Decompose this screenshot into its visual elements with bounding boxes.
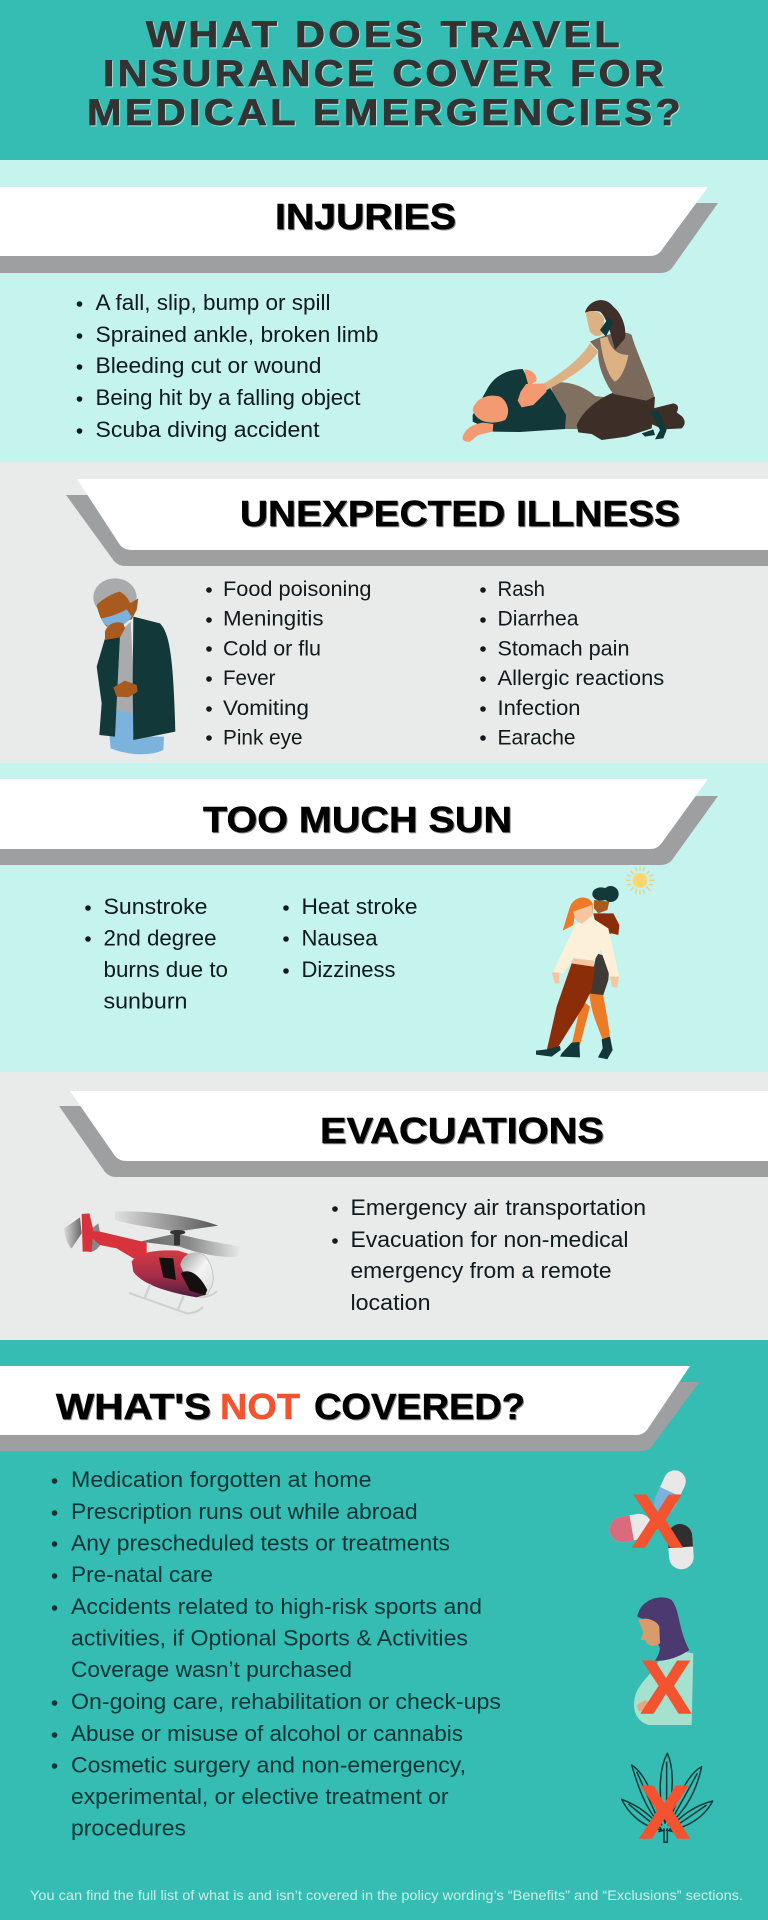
- list: sun column 2: Heat stroke: [302, 894, 418, 919]
- list: sun column 1: 2nd degree: [104, 926, 216, 950]
- list: sun column 2: Dizziness: [302, 957, 396, 982]
- list: illnesses column 2: Diarrhea: [498, 608, 579, 631]
- list: exclusions: Prescription runs out while abroad: [71, 1499, 418, 1524]
- icon: pregnant woman crossed out: [634, 1597, 693, 1729]
- list: sun column 1: [85, 894, 228, 1014]
- list: illnesses column 2: [480, 578, 664, 750]
- list: illnesses column 2: Infection: [498, 697, 580, 720]
- list: injuries: A fall, slip, bump or spill: [96, 290, 330, 315]
- icon: capsules crossed out: X: [632, 1479, 683, 1563]
- ribbon: unexpected illness: [66, 479, 768, 566]
- title: WHAT DOES TRAVEL: [146, 14, 623, 55]
- list: exclusions: Accidents related to high-risk sports and: [71, 1594, 482, 1619]
- list: sun column 1: Sunstroke: [104, 894, 208, 919]
- heading: too much sun: TOO MUCH SUN: [203, 799, 512, 840]
- list: illnesses column 1: Fever: [223, 667, 276, 690]
- list: evacuations: [332, 1195, 646, 1315]
- list: illnesses column 1: Meningitis: [223, 608, 324, 631]
- heading: evacuations: EVACUATIONS: [320, 1110, 604, 1151]
- ribbon: evacuations: [59, 1091, 768, 1177]
- header panel: [0, 0, 768, 160]
- list: injuries: Sprained ankle, broken limb: [96, 322, 378, 347]
- list: illnesses column 2: Allergic reactions: [498, 667, 664, 690]
- list: injuries: [77, 290, 378, 442]
- list: sun column 2: [283, 894, 418, 982]
- list: sun column 1: burns due to: [104, 957, 228, 982]
- illustration: woman calling for help beside injured man: [462, 300, 685, 442]
- illustration: red helicopter: [64, 1211, 240, 1313]
- list: sun column 2: Nausea: [302, 926, 378, 950]
- icon: pregnant woman crossed out: X: [641, 1645, 691, 1729]
- list: exclusions: procedures: [71, 1816, 186, 1840]
- icon: cannabis leaf crossed out: X: [639, 1770, 690, 1854]
- heading: injuries: INJURIES: [275, 196, 456, 237]
- icon: capsules crossed out: [608, 1467, 695, 1570]
- list: exclusions: Pre-natal care: [71, 1562, 213, 1587]
- list: illnesses column 1: Vomiting: [223, 697, 309, 720]
- list: injuries: Bleeding cut or wound: [96, 353, 322, 378]
- list: illnesses column 2: Stomach pain: [498, 637, 630, 660]
- list: illnesses column 2: Earache: [498, 726, 576, 750]
- heading: unexpected illness: UNEXPECTED ILLNESS: [240, 493, 680, 534]
- list: evacuations: Emergency air transportation: [350, 1195, 646, 1220]
- list: exclusions: [52, 1467, 501, 1840]
- title: MEDICAL EMERGENCIES?: [87, 92, 684, 133]
- icon: cannabis leaf crossed out: [622, 1753, 713, 1854]
- heading: what's not covered: NOT: [220, 1386, 300, 1427]
- heading: what's not covered: WHAT'S: [56, 1386, 211, 1427]
- heading: what's not covered: COVERED?: [314, 1386, 525, 1427]
- list: exclusions: Abuse or misuse of alcohol or cannabis: [71, 1721, 463, 1746]
- list: exclusions: experimental, or elective treatment or: [71, 1784, 449, 1809]
- list: evacuations: emergency from a remote: [350, 1258, 612, 1283]
- list: illnesses column 2: Rash: [498, 578, 545, 601]
- list: sun column 1: sunburn: [104, 988, 188, 1014]
- panel: not covered: [0, 1340, 768, 1920]
- list: evacuations: location: [350, 1290, 430, 1315]
- panel: injuries: [0, 160, 768, 462]
- panel: unexpected illness: [0, 462, 768, 763]
- title: [87, 14, 684, 133]
- list: injuries: Being hit by a falling object: [96, 385, 360, 410]
- heading: what's not covered: [56, 1386, 525, 1427]
- panel: too much sun: [0, 763, 768, 1072]
- list: injuries: Scuba diving accident: [96, 417, 320, 442]
- illustration: woman supporting fainting friend under the sun: [536, 867, 654, 1059]
- ribbon: not covered: [0, 1366, 700, 1451]
- list: illnesses column 1: Cold or flu: [223, 637, 321, 660]
- ribbon: too much sun: [0, 779, 718, 865]
- list: illnesses column 1: [206, 578, 372, 750]
- list: illnesses column 1: Pink eye: [223, 726, 302, 750]
- list: exclusions: Coverage wasn’t purchased: [71, 1657, 352, 1682]
- illustration: sick man wearing mask: [93, 578, 175, 754]
- list: exclusions: Medication forgotten at home: [71, 1467, 372, 1492]
- title: INSURANCE COVER FOR: [103, 53, 667, 94]
- footnote: You can find the full list of what is and isn’t covered in the policy wording’s “Benefits” and “Exclusions” sections.: [30, 1887, 743, 1903]
- list: exclusions: On-going care, rehabilitation or check-ups: [71, 1689, 501, 1714]
- list: illnesses column 1: Food poisoning: [223, 578, 372, 601]
- panel: evacuations: [0, 1072, 768, 1340]
- list: exclusions: Cosmetic surgery and non-emergency,: [71, 1752, 466, 1778]
- ribbon: injuries: [0, 187, 718, 273]
- list: evacuations: Evacuation for non-medical: [350, 1227, 628, 1252]
- list: exclusions: activities, if Optional Sports & Activities: [71, 1626, 468, 1650]
- list: exclusions: Any prescheduled tests or treatments: [71, 1530, 450, 1556]
